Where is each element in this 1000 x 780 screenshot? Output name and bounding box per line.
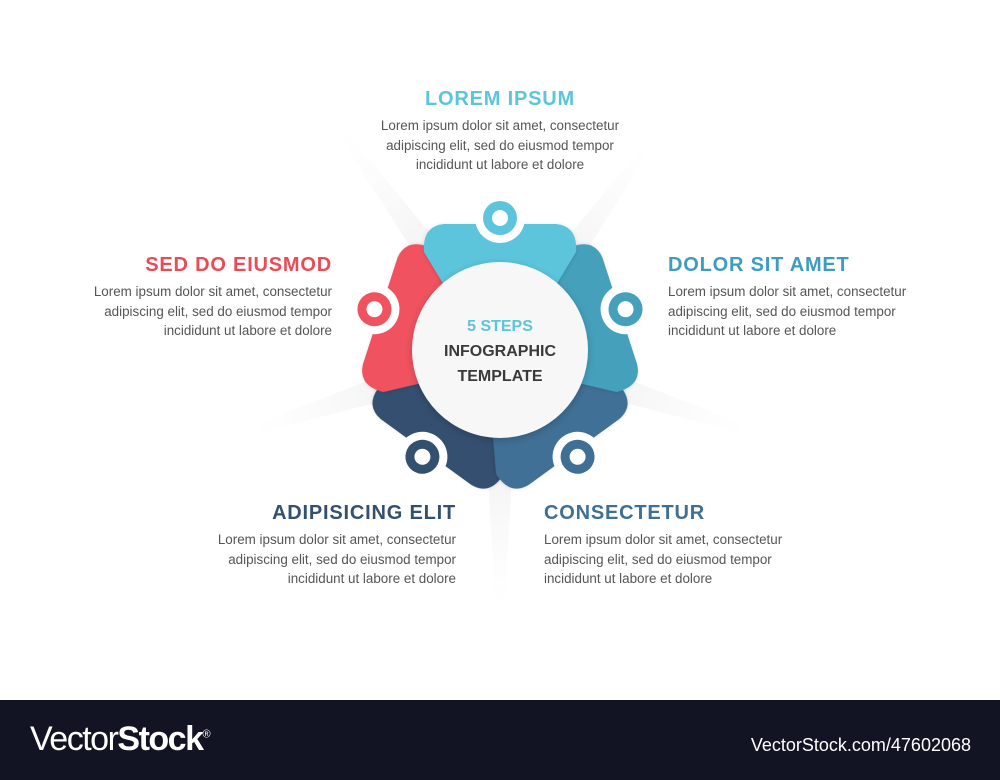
- center circle: 5 STEPS: [467, 318, 533, 335]
- text block: lorem ipsum: incididunt ut labore et dolore: [416, 157, 584, 172]
- center circle: INFOGRAPHIC: [444, 343, 556, 360]
- footer logo: VectorStock®: [30, 720, 209, 758]
- segment: bottom right: [471, 350, 654, 522]
- text block: sed do eiusmod: incididunt ut labore et dolore: [164, 323, 332, 338]
- segment: top: [424, 193, 576, 295]
- text block: adipisicing elit: Lorem ipsum dolor sit amet, consectetur: [218, 532, 456, 547]
- segment: bottom left: [346, 350, 529, 522]
- text block: sed do eiusmod: SED DO EIUSMOD: [145, 254, 332, 276]
- text block: adipisicing elit: adipiscing elit, sed do eiusmod tempor: [228, 552, 456, 566]
- text block: sed do eiusmod: adipiscing elit, sed do eiusmod tempor: [104, 304, 332, 318]
- center circle: TEMPLATE: [457, 368, 543, 385]
- text block: dolor sit amet: Lorem ipsum dolor sit amet, consectetur: [668, 284, 906, 299]
- text block: consectetur: Lorem ipsum dolor sit amet, consectetur: [544, 532, 782, 547]
- segment: left: [327, 229, 471, 405]
- text block: adipisicing elit: [218, 502, 456, 586]
- text block: sed do eiusmod: [94, 254, 332, 338]
- text block: adipisicing elit: incididunt ut labore et dolore: [288, 571, 456, 586]
- center circle: [412, 262, 588, 438]
- text block: sed do eiusmod: Lorem ipsum dolor sit amet, consectetur: [94, 284, 332, 299]
- segment: right: [529, 229, 673, 405]
- text block: dolor sit amet: adipiscing elit, sed do eiusmod tempor: [668, 304, 896, 318]
- text block: consectetur: adipiscing elit, sed do eiusmod tempor: [544, 552, 772, 566]
- text block: dolor sit amet: DOLOR SIT AMET: [668, 254, 850, 276]
- text block: lorem ipsum: adipiscing elit, sed do eiusmod tempor: [386, 138, 614, 152]
- text block: lorem ipsum: LOREM IPSUM: [425, 88, 575, 110]
- text block: lorem ipsum: Lorem ipsum dolor sit amet, consectetur: [381, 118, 619, 133]
- footer url: VectorStock.com/47602068: [751, 735, 971, 755]
- text block: lorem ipsum: [381, 88, 619, 172]
- text block: consectetur: [544, 502, 782, 586]
- text block: consectetur: CONSECTETUR: [544, 502, 705, 524]
- text block: consectetur: incididunt ut labore et dolore: [544, 571, 712, 586]
- text block: dolor sit amet: [668, 254, 906, 338]
- text block: adipisicing elit: ADIPISICING ELIT: [272, 502, 456, 524]
- text block: dolor sit amet: incididunt ut labore et dolore: [668, 323, 836, 338]
- footer bar: [0, 700, 1000, 780]
